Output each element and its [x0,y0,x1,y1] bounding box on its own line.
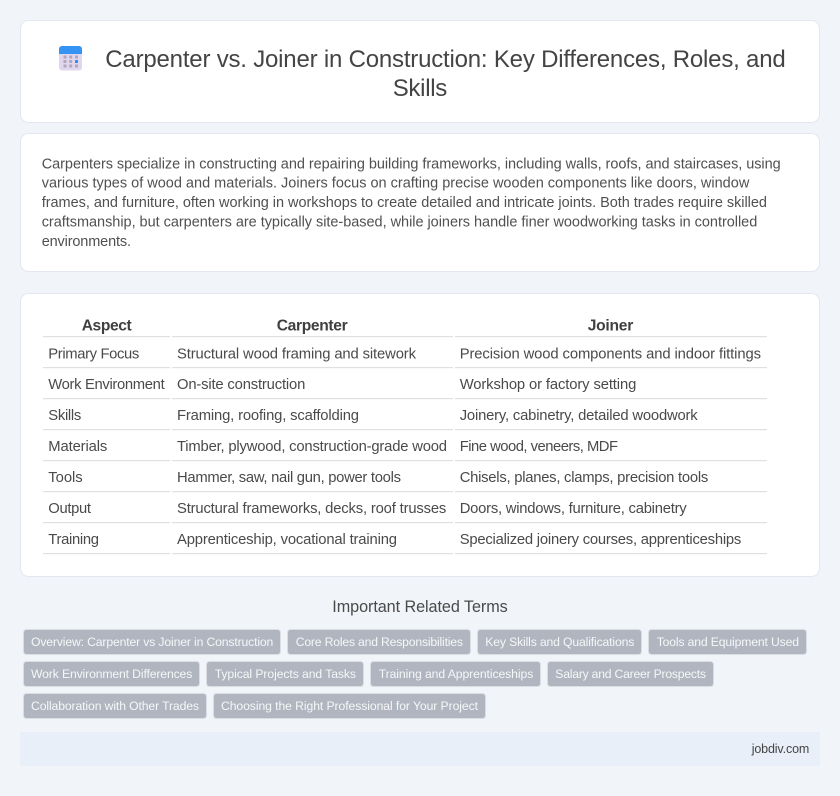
row: tools: Tools [48,470,83,486]
chip: tools: Tools and Equipment Used [657,635,799,649]
title [105,46,786,102]
intro paragraph: environments. [42,234,131,250]
chip: choosing: Choosing the Right Professional for Your Project [221,699,479,713]
chip: work environment: Work Environment Differences [31,667,192,681]
row: skills: Framing, roofing, scaffolding [177,408,359,424]
chip: salary: Salary and Career Prospects [555,667,706,681]
row: output: Structural frameworks, decks, roof trusses [177,501,446,517]
row: tools: Chisels, planes, clamps, precision tools [460,470,708,486]
title: Skills [393,75,447,102]
table header row: Carpenter [277,318,348,335]
table header row: Aspect [82,318,132,335]
chip: collaboration: Collaboration with Other Trades [31,699,199,713]
panel: intro text card [20,134,820,272]
chip: key skills: Key Skills and Qualifications [485,635,634,649]
row: training: Apprenticeship, vocational training [177,532,397,548]
chip: core roles: Core Roles and Responsibilities [296,635,463,649]
chip: training [370,662,540,686]
chip: overview: Overview: Carpenter vs Joiner in Construction [31,635,273,649]
panel: title card [20,20,820,122]
row: materials: Timber, plywood, construction-grade wood [177,439,447,455]
footer source: jobdiv.com [751,742,809,756]
chip: salary [548,662,714,686]
row: materials [43,439,767,461]
chip: training: Training and Apprenticeships [379,667,533,681]
row: skills [43,408,767,430]
table header row [43,318,767,337]
chip: choosing [214,694,486,718]
row: output: Doors, windows, furniture, cabinetry [460,501,687,517]
chip: typical projects: Typical Projects and Tasks [215,667,356,681]
row: output: Output [48,501,91,517]
chip: overview [24,630,280,654]
intro paragraph: frames, and furniture, often working in workshops to create detailed and intricate joints. Both trades require skilled [42,195,767,211]
footer [20,732,820,766]
heading: important related terms: Important Related Terms [332,598,508,616]
row: materials: Fine wood, veneers, MDF [460,439,618,455]
chip: work environment [24,662,200,686]
related term chips [24,630,806,718]
row: work environment: Work Environment [48,377,165,393]
intro paragraph: various types of wood and materials. Joiners focus on crafting precise wooden components like doors, window [42,176,750,192]
row: skills: Skills [48,408,81,424]
intro paragraph [42,156,781,250]
row: tools: Hammer, saw, nail gun, power tools [177,470,401,486]
chip: typical projects [206,662,364,686]
panel: comparison table card [20,294,820,576]
row: primary focus [43,346,767,368]
row: primary focus: Precision wood components and indoor fittings [460,346,761,362]
chip: collaboration [24,694,206,718]
chip: key skills [478,630,642,654]
row: training: Specialized joinery courses, apprenticeships [460,532,741,548]
row: work environment [43,377,767,399]
title: Carpenter vs. Joiner in Construction: Key Differences, Roles, and [105,46,786,73]
row: work environment: On-site construction [177,377,305,393]
row: primary focus: Primary Focus [48,346,139,362]
intro paragraph: craftsmanship, but carpenters are typically site-based, while joiners handle finer woodworking tasks in controlled [42,214,757,230]
row: materials: Materials [48,439,107,455]
row: skills: Joinery, cabinetry, detailed woodwork [460,408,698,424]
intro paragraph: Carpenters specialize in constructing and repairing building frameworks, including walls, roofs, and staircases, using [42,156,781,172]
icon: calendar [59,46,82,70]
row: tools [43,470,767,492]
row: work environment: Workshop or factory setting [460,377,636,393]
row: training: Training [48,532,99,548]
row: primary focus: Structural wood framing and sitework [177,346,417,362]
row: training [43,532,767,554]
chip: core roles [288,630,470,654]
chip: tools [648,630,806,654]
row: output [43,501,767,523]
table header row: Joiner [588,318,633,335]
